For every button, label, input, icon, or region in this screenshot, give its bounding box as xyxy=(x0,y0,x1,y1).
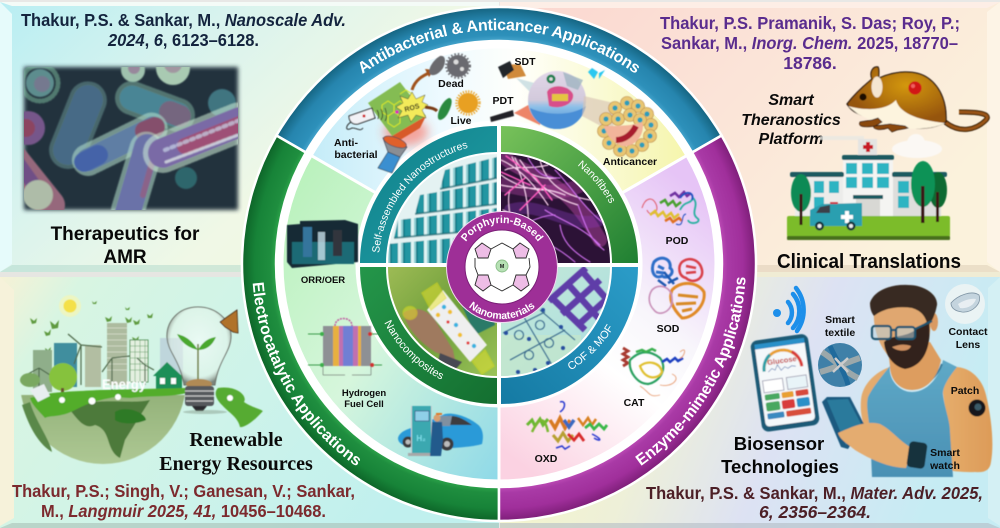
inner ring: nanocomposites: Nanocomposites xyxy=(384,320,444,379)
icon: sun xyxy=(59,295,81,317)
inner ring: nanofibers: Nanofibers xyxy=(578,160,614,203)
image: rod-shaped bacteria xyxy=(11,51,240,212)
citation: Inorg. Chem: Sankar, M., Inorg. Chem. 2025, 18770– xyxy=(661,33,958,53)
icon: dead bacteria xyxy=(429,54,470,78)
center badge: porphyrin-based nanomaterials xyxy=(446,211,558,323)
label: ORR/OER: ORR/OER xyxy=(301,275,345,286)
labels: top sector: Dead xyxy=(438,78,464,90)
heading: therapeutics for AMR: Therapeutics for xyxy=(51,224,200,245)
held phone xyxy=(822,397,864,449)
icon: contact lens xyxy=(945,284,985,324)
icon: hydrogen fuel cell xyxy=(308,318,382,375)
label: smart textile: textile xyxy=(825,327,855,339)
labels: top sector: SDT xyxy=(514,56,536,68)
heading: biosensor technologies: Technologies xyxy=(721,456,839,477)
icon: ROS nanomaterial with light and ultrasound xyxy=(347,54,658,173)
image: COF and MOF lattices xyxy=(501,267,611,377)
label: smart textile: Smart xyxy=(825,314,855,326)
citation: Mater. Adv xyxy=(646,483,983,522)
citation: Nanoscale Adv xyxy=(21,10,346,50)
icon: live bacteria xyxy=(438,92,480,120)
panel: clinical translations xyxy=(500,2,1000,273)
center badge: porphyrin-based nanomaterials: Nanomaterials xyxy=(469,302,534,320)
icon: hospital with ambulance xyxy=(787,134,950,240)
citation: Mater. Adv: 6, 2356–2364. xyxy=(759,502,871,522)
inner ring: nanocomposites xyxy=(360,267,497,404)
caption: smart theranostics platform: Platform xyxy=(759,131,823,148)
citation: Inorg. Chem: 18786. xyxy=(783,53,837,73)
label: OXD: OXD xyxy=(535,453,558,465)
icon: mouse with tumour xyxy=(847,67,987,132)
sector: antibacterial and anticancer xyxy=(311,47,687,193)
icon: butterfly xyxy=(220,310,238,333)
heading: clinical translations: Clinical Translations xyxy=(777,251,961,273)
illustration: green city on globe with bulb xyxy=(20,295,263,464)
sector: electrocatalytic xyxy=(282,156,499,481)
labels: patch and smart watch: Patch xyxy=(951,385,979,397)
labels: top sector: Anti- xyxy=(334,137,358,149)
icon: OXD protein xyxy=(527,402,607,449)
central wheel xyxy=(240,6,758,522)
outer ring: antibacterial and anticancer applications xyxy=(276,6,722,151)
labels: top sector: Anticancer xyxy=(603,156,657,168)
neck xyxy=(888,342,941,390)
icon: wifi signal xyxy=(773,288,804,331)
icon: ROS starburst: ROS xyxy=(404,103,421,114)
inner ring: COF and MOF xyxy=(501,267,638,404)
image: self-assembled terraces xyxy=(388,154,498,264)
face xyxy=(874,301,931,368)
icon: smart textile xyxy=(818,343,862,387)
outer ring: enzyme-mimetic applications xyxy=(498,134,758,522)
image: nanofibers xyxy=(501,154,611,264)
label: CAT: CAT xyxy=(624,397,645,409)
globe xyxy=(20,394,186,464)
icon: lightbulb with seedling xyxy=(167,307,231,414)
icon: H2 car at fuel pump: H₂ xyxy=(416,434,426,443)
labels: top sector: PDT xyxy=(492,95,514,107)
outer ring: electrocatalytic applications: Electrocatalytic Applications xyxy=(252,282,360,466)
citation: Nanoscale Adv: Thakur, P.S. & Sankar, M., Nanoscale Adv. xyxy=(21,10,346,30)
caption: smart theranostics platform: Smart xyxy=(768,92,814,109)
tank top xyxy=(867,360,957,477)
heading: renewable energy resources xyxy=(159,429,313,475)
heading: renewable energy resources: Energy Resources xyxy=(159,453,313,475)
center badge: porphyrin-based nanomaterials: Porphyrin-Based xyxy=(460,215,544,242)
heading: renewable energy resources: Renewable xyxy=(189,429,283,451)
icon: glucose smartphone: Glucose xyxy=(767,354,797,367)
hand and forearm xyxy=(838,423,912,468)
beard xyxy=(884,320,930,369)
icon: SOD protein xyxy=(649,258,704,318)
inner ring: COF and MOF: COF & MOF xyxy=(568,324,611,369)
label: contact lens: Contact xyxy=(948,326,988,338)
icon: POD protein xyxy=(642,192,699,225)
icon: ORR/OER electrolyser xyxy=(287,220,358,268)
icon: ROS starburst xyxy=(396,92,428,122)
smart watch xyxy=(906,441,928,469)
hair xyxy=(870,285,937,326)
label: SOD: SOD xyxy=(657,323,680,335)
panel: renewable energy resources xyxy=(0,272,499,528)
caption: smart theranostics platform: Theranostics xyxy=(741,112,841,129)
illustration: tumour tissue xyxy=(598,96,658,158)
label: POD: POD xyxy=(666,235,689,247)
right arm xyxy=(912,362,992,472)
labels: top sector: Live xyxy=(450,115,472,127)
illustration: green city on globe with bulb: Energy xyxy=(102,377,146,392)
citation: Inorg. Chem: Thakur, P.S. Pramanik, S. Das; Roy, P.; xyxy=(660,13,960,33)
labels: patch and smart watch: Smart xyxy=(930,447,960,459)
citation: Langmuir: M., Langmuir 2025, 41, 10456–10468. xyxy=(41,501,326,521)
labels: patch and smart watch: watch xyxy=(929,460,960,472)
inner ring: nanofibers xyxy=(501,126,638,263)
heading: biosensor technologies: Biosensor xyxy=(734,433,824,454)
citation: Nanoscale Adv: 2024, 6, 6123–6128. xyxy=(107,30,259,50)
outer ring: antibacterial and anticancer applications: Antibacterial & Anticancer Applications xyxy=(360,18,639,74)
icon: MOF framework xyxy=(503,307,575,374)
image: nanocomposite tube xyxy=(388,267,498,377)
label: hydrogen fuel cell: Hydrogen xyxy=(342,388,386,399)
icon: flashlight xyxy=(378,134,408,173)
labels: top sector xyxy=(334,56,657,168)
icon: SDT ultrasound xyxy=(498,61,538,92)
panel: therapeutics for AMR xyxy=(0,2,499,272)
label: contact lens: Lens xyxy=(956,339,980,351)
left shoulder xyxy=(861,367,890,432)
icon: H2 car at fuel pump xyxy=(398,406,483,456)
labels: top sector: bacterial xyxy=(334,149,378,161)
icon: CAT protein xyxy=(623,348,685,396)
heading: therapeutics for AMR: AMR xyxy=(103,247,147,268)
ear xyxy=(930,313,938,331)
outer ring: electrocatalytic applications xyxy=(240,135,499,522)
panel: biosensor technologies xyxy=(500,272,1000,528)
citation: Langmuir xyxy=(12,481,355,521)
icon: purple COF lattice xyxy=(549,268,610,330)
icon: PDT red light cone xyxy=(490,95,546,125)
outer ring: enzyme-mimetic applications: Enzyme-mimetic Applications xyxy=(635,277,746,466)
inner ring: self-assembled nanostructures xyxy=(360,126,497,263)
label: hydrogen fuel cell: Fuel Cell xyxy=(344,399,384,410)
sector: enzyme-mimetic xyxy=(499,156,716,481)
citation: Inorg. Chem xyxy=(660,13,960,73)
patch xyxy=(968,400,986,416)
glasses xyxy=(872,326,915,339)
icon: porphyrin molecule: M xyxy=(500,264,505,270)
citation: Langmuir: Thakur, P.S.; Singh, V.; Ganesan, V.; Sankar, xyxy=(12,481,355,501)
icon: glucose smartphone xyxy=(750,333,820,432)
figure: man with wearables xyxy=(822,285,992,477)
illustration: cancer cell cross-section xyxy=(528,68,618,132)
inner ring: self-assembled nanostructures: Self-assembled Nanostructures xyxy=(372,142,468,252)
citation: Mater. Adv: Thakur, P.S. & Sankar, M., Mater. Adv. 2025, xyxy=(646,483,983,503)
